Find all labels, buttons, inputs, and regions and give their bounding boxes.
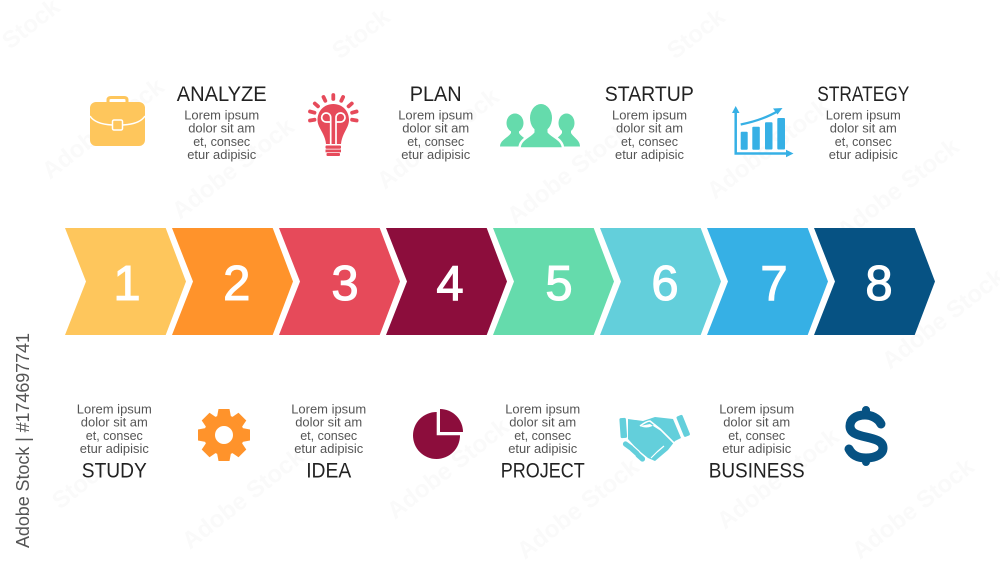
text: startup: STARTUP: [605, 83, 694, 106]
text: business: BUSINESS: [709, 459, 805, 482]
text: strategy: etur adipisic: [829, 147, 898, 162]
text: Stock: [327, 3, 396, 65]
chevron 7: [707, 228, 828, 335]
text: idea: et, consec: [300, 428, 358, 443]
text: strategy: STRATEGY: [817, 83, 909, 106]
text: plan: [398, 83, 473, 162]
text: strategy: [817, 83, 909, 162]
text: project: PROJECT: [501, 459, 585, 482]
text: business: [709, 401, 805, 482]
chevron 4: 4: [436, 257, 464, 311]
text: strategy: et, consec: [835, 134, 892, 149]
chevron 1: [65, 228, 186, 335]
chevron 1: 1: [113, 257, 141, 311]
text: Adobe Stock: [37, 73, 170, 185]
icon: dollar sign: [849, 410, 883, 462]
text: plan: et, consec: [407, 134, 465, 149]
text: plan: etur adipisic: [401, 147, 471, 162]
text: idea: Lorem ipsum: [291, 401, 366, 416]
text: startup: dolor sit am: [616, 121, 683, 136]
text: study: etur adipisic: [80, 441, 149, 456]
text: business: et, consec: [728, 428, 786, 443]
text: Adobe Stock: [502, 118, 635, 230]
text: Adobe Stock: [512, 453, 645, 563]
text: Stock: [47, 453, 116, 515]
text: business: Lorem ipsum: [719, 401, 794, 416]
icon: growth chart: [732, 106, 794, 157]
text: Stock: [662, 3, 731, 65]
text: business: dolor sit am: [723, 415, 790, 430]
text: Adobe Stock: [702, 93, 835, 205]
chevron 2: 2: [223, 257, 250, 311]
icon: pie chart: [413, 409, 463, 459]
icon: handshake: [619, 414, 690, 461]
icon: light bulb: [310, 95, 357, 156]
text: Adobe Stock: [847, 453, 980, 563]
text: study: dolor sit am: [81, 415, 148, 430]
text: Adobe Stock: [832, 133, 965, 245]
text: idea: [291, 401, 366, 482]
text: strategy: dolor sit am: [830, 121, 897, 136]
chevron 7: 7: [760, 257, 788, 311]
chevron 6: 6: [651, 257, 679, 311]
text: analyze: et, consec: [193, 134, 251, 149]
chevron 5: [493, 228, 614, 335]
text: project: [501, 401, 585, 482]
icon: briefcase: [90, 98, 145, 146]
text: analyze: Lorem ipsum: [184, 107, 259, 122]
text: project: dolor sit am: [509, 415, 576, 430]
chevron 6: [600, 228, 721, 335]
chevron 2: [172, 228, 293, 335]
text: analyze: [177, 83, 267, 162]
text: analyze: ANALYZE: [177, 83, 267, 106]
text: project: etur adipisic: [508, 441, 578, 456]
chevron 8: [814, 228, 935, 335]
text: analyze: dolor sit am: [188, 121, 255, 136]
chevron 3: 3: [331, 257, 359, 311]
text: Adobe Stock: [167, 113, 300, 225]
text: Adobe Stock: [177, 443, 310, 555]
text: Adobe Stock: [382, 413, 515, 525]
icon: gear: [198, 409, 250, 461]
text: startup: et, consec: [621, 134, 678, 149]
text: startup: Lorem ipsum: [612, 107, 687, 122]
text: business: etur adipisic: [722, 441, 792, 456]
chevron 8: 8: [865, 257, 893, 311]
text: Adobe Stock: [372, 83, 505, 195]
text: idea: etur adipisic: [294, 441, 364, 456]
text: study: [77, 401, 152, 482]
text: project: et, consec: [514, 428, 572, 443]
text: plan: dolor sit am: [402, 121, 469, 136]
text: Adobe Stock: [712, 423, 845, 535]
text: plan: Lorem ipsum: [398, 107, 473, 122]
chevron row: [65, 228, 935, 335]
text: project: Lorem ipsum: [505, 401, 580, 416]
text: idea: IDEA: [306, 459, 351, 482]
text: study: Lorem ipsum: [77, 401, 152, 416]
text: startup: etur adipisic: [615, 147, 684, 162]
text: idea: dolor sit am: [295, 415, 362, 430]
watermark id: Adobe Stock | #174697741: [13, 333, 33, 548]
text: study: et, consec: [86, 428, 143, 443]
text: analyze: etur adipisic: [187, 147, 257, 162]
icon: people: [500, 104, 580, 148]
chevron 3: [279, 228, 400, 335]
chevron 5: 5: [545, 257, 573, 311]
text: strategy: Lorem ipsum: [826, 107, 901, 122]
chevron 4: [386, 228, 507, 335]
text: plan: PLAN: [410, 83, 462, 106]
text: startup: [605, 83, 694, 162]
text: study: STUDY: [82, 459, 147, 482]
